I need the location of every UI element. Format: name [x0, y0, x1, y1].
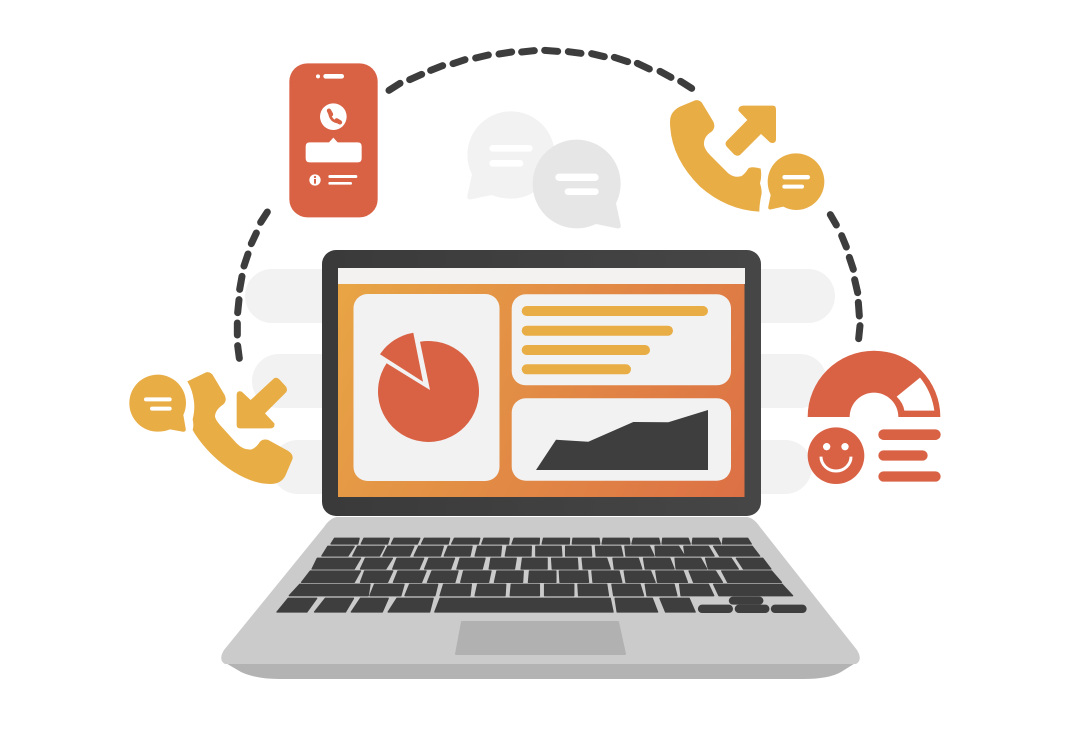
icon: call circle	[320, 103, 347, 130]
handset	[187, 372, 293, 484]
grey chat bubbles	[467, 111, 621, 228]
arrow down-left	[237, 378, 287, 428]
icon: outgoing call	[670, 100, 824, 212]
screen background	[338, 284, 744, 497]
icon: incoming call	[129, 372, 293, 484]
laptop base	[221, 517, 860, 664]
background pills	[245, 269, 835, 494]
screen title bar	[338, 268, 745, 284]
laptop bezel	[322, 250, 761, 516]
light chat bubble	[467, 111, 555, 199]
panel: pie chart	[354, 294, 500, 481]
touchpad	[456, 622, 625, 654]
speech bubble	[768, 153, 824, 210]
panel: bars	[512, 294, 731, 385]
gauge	[808, 351, 940, 417]
pie slice	[380, 333, 423, 382]
icon: satisfaction gauge	[808, 351, 941, 484]
icon: smiley	[808, 427, 864, 484]
dashed arc: top	[389, 50, 692, 90]
handset	[670, 100, 762, 212]
dashed arc: left	[237, 212, 267, 358]
message box	[306, 138, 362, 162]
icon: info	[309, 174, 321, 186]
pie body	[378, 341, 479, 442]
speech bubble	[129, 375, 186, 432]
laptop	[221, 250, 860, 679]
arrow up-right	[725, 106, 776, 156]
laptop base shadow	[224, 662, 857, 679]
icon: mobile phone	[289, 63, 378, 217]
dashed arc: right	[830, 215, 860, 339]
keyboard	[277, 538, 806, 612]
darker chat bubble	[533, 140, 621, 228]
rating lines	[878, 429, 941, 482]
panel: area chart	[512, 398, 731, 481]
